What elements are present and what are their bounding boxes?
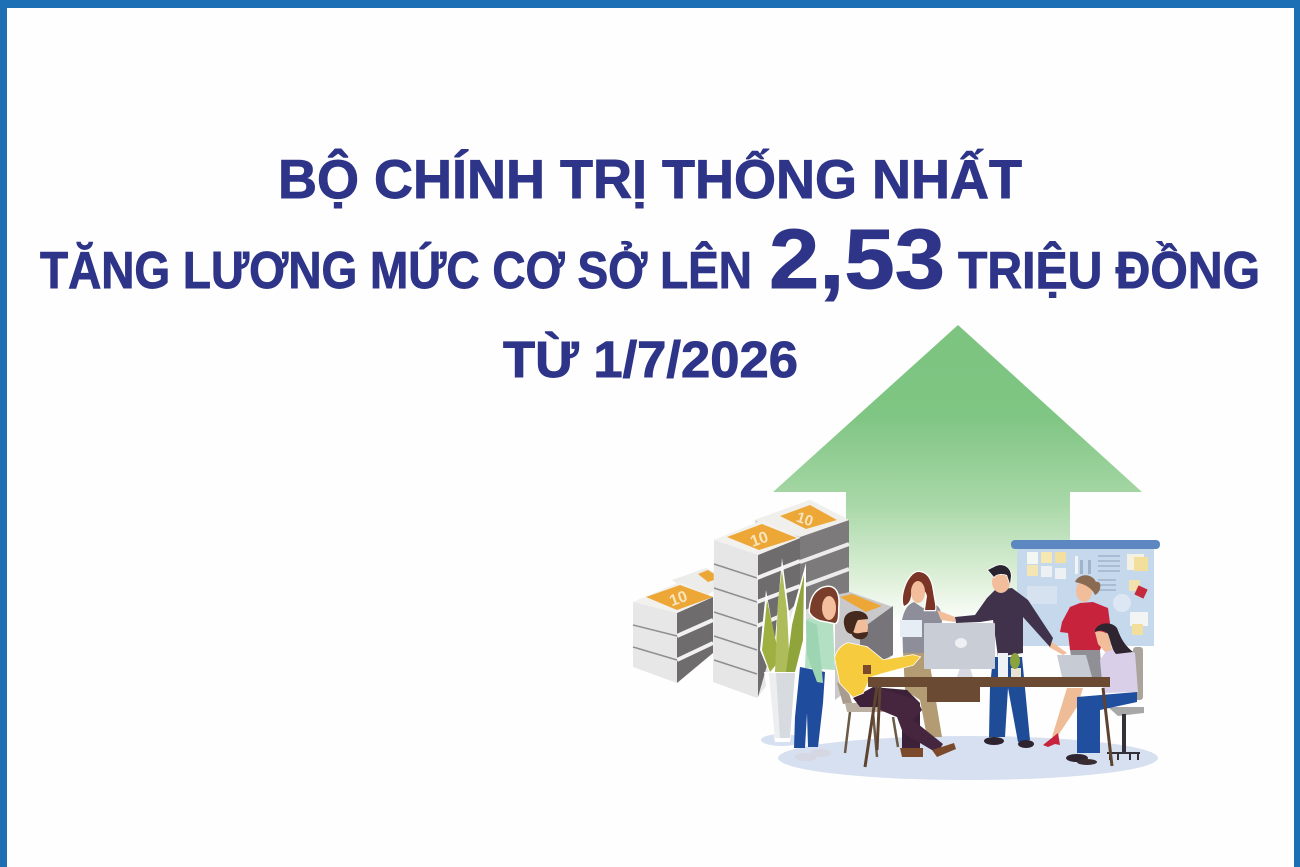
person: seated man: [835, 611, 956, 757]
desk items: [998, 653, 1021, 677]
person: woman with tablet: [900, 572, 942, 737]
laptop: [1057, 655, 1092, 677]
rear right stack: [835, 592, 893, 700]
person: seated woman: [1066, 623, 1144, 765]
title line 1: BỘ CHÍNH TRỊ THỐNG NHẤT: [278, 148, 1022, 210]
person: woman in green: [794, 587, 838, 761]
planning board: [1011, 540, 1160, 646]
computer monitor: [924, 623, 995, 677]
highlighted number: 2,53: [769, 212, 945, 306]
title line 2 right: TRIỆU ĐỒNG: [958, 241, 1260, 300]
person: woman in red: [1043, 575, 1110, 747]
middle stack: [713, 520, 800, 698]
money stacks: [633, 500, 893, 700]
person: standing man: [937, 565, 1067, 748]
money label: 10: [667, 588, 690, 610]
rear left stack: [672, 568, 730, 600]
back stack: [755, 500, 849, 640]
money label: 10: [748, 529, 771, 551]
green up arrow: [773, 325, 1142, 640]
seated man chair: [837, 680, 898, 757]
title: [40, 148, 1260, 388]
table: [865, 677, 1112, 767]
potted plant: [760, 558, 806, 746]
money label: 10: [794, 509, 815, 530]
title line 3: TỪ 1/7/2026: [503, 331, 798, 388]
title line 2 left: TĂNG LƯƠNG MỨC CƠ SỞ LÊN: [40, 241, 752, 300]
front stack: [633, 582, 713, 683]
floor shadow: [778, 736, 1158, 780]
